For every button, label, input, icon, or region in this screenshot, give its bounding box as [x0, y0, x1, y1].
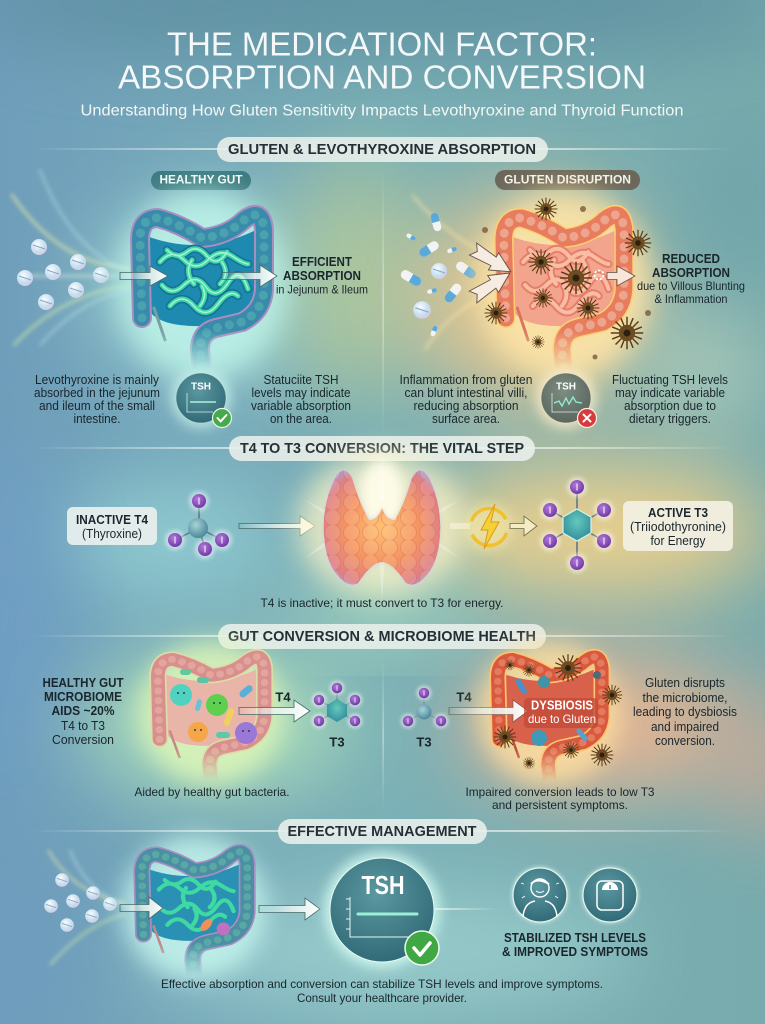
arrow: gut to TSH: [259, 898, 320, 920]
molecule: T3 before gut: [400, 686, 448, 728]
arrow: T4 to thyroid: [239, 516, 315, 536]
section heading: T4 to T3 conversion: [30, 436, 735, 461]
label: active T3: [623, 501, 733, 551]
label: active T3: for Energy: [650, 534, 706, 548]
text: fluctuating TSH note: absorption due to: [624, 399, 716, 413]
panel: effective management: [44, 836, 648, 1005]
text: gluten disrupts: [633, 676, 737, 748]
text: inflammation effect: surface area.: [432, 412, 500, 426]
molecule: T3: [540, 477, 614, 573]
icon: fluctuating TSH gauge: TSH: [556, 382, 576, 392]
arrow: T4 into dysbiosis: [449, 700, 528, 722]
pills: [44, 873, 117, 932]
arrow: out of gut: [222, 265, 277, 287]
text: fluctuating TSH note: dietary triggers.: [629, 412, 711, 426]
icon: healthy microbiome gut: [138, 641, 284, 785]
pills: [17, 239, 109, 310]
caption: T4 inactive: T4 is inactive; it must convert to T3 for energy.: [260, 596, 504, 610]
icon: restored intestine: [122, 836, 267, 980]
text: inflammation effect: reducing absorption: [414, 399, 519, 413]
badge: healthy gut: HEALTHY GUT: [160, 174, 242, 186]
arrow: bolt to T3: [510, 516, 537, 536]
flow streams: [12, 170, 130, 345]
icon: person: [512, 867, 568, 923]
text: microbiome stat: AIDS ~20%: [52, 704, 114, 718]
text: inflammation effect: can blunt intestinal villi,: [404, 386, 528, 400]
text: microbiome stat: MICROBIOME: [44, 690, 122, 704]
label: T3: T3: [329, 734, 345, 750]
label: stabilized TSH: & IMPROVED SYMPTOMS: [502, 945, 648, 959]
label: inactive T4: [67, 507, 157, 545]
text: microbiome stat: T4 to T3: [61, 719, 105, 733]
icon: stable TSH chart: TSH: [362, 870, 404, 900]
badge: healthy gut: [151, 171, 251, 190]
text: TSH note: [251, 373, 351, 426]
caption: closing advice: Consult your healthcare provider.: [297, 991, 467, 1005]
text: TSH note: on the area.: [270, 412, 332, 426]
text: fluctuating TSH note: [612, 373, 728, 426]
label: reduced absorption: REDUCED: [662, 252, 720, 266]
text: TSH note: Statuciite TSH: [264, 373, 338, 387]
section heading: T4 to T3 conversion: T4 TO T3 CONVERSION: THE VITAL STEP: [240, 440, 524, 457]
text: absorption site: [34, 373, 160, 426]
panel: conversion flow: [67, 452, 733, 610]
badge: gluten disruption: [495, 170, 640, 190]
text: gluten disrupts: conversion.: [655, 734, 715, 748]
text: inflammation effect: [400, 373, 533, 426]
title: THE MEDICATION FACTOR:: [167, 26, 597, 62]
caption: healthy bacteria: Aided by healthy gut bacteria.: [134, 785, 290, 799]
caption: impaired conversion: and persistent symptoms.: [492, 798, 628, 812]
text: gluten disrupts: Gluten disrupts: [645, 676, 725, 690]
label: dysbiosis: DYSBIOSIS: [531, 698, 593, 712]
arrow: pills into gut: [120, 897, 163, 919]
icon: stable TSH gauge: [171, 368, 232, 428]
title: ABSORPTION AND CONVERSION: [118, 58, 646, 96]
icon: energy bolt: [450, 503, 513, 551]
label: reduced absorption: due to Villous Blunting: [637, 279, 745, 293]
caption: impaired conversion: [466, 785, 655, 812]
icon: gluten particles: [482, 198, 651, 360]
flow streams: [412, 195, 500, 350]
molecule: T3 output: [312, 680, 362, 728]
label: stabilized TSH: [502, 931, 648, 959]
label: efficient absorption: in Jejunum & Ileum: [276, 282, 368, 296]
label: reduced absorption: ABSORPTION: [652, 266, 730, 280]
subtitle: Understanding How Gluten Sensitivity Impacts Levothyroxine and Thyroid Function: [80, 102, 684, 120]
label: T4: T4: [275, 690, 291, 704]
panel: dysbiosis: [400, 641, 737, 812]
label: stabilized TSH: STABILIZED TSH LEVELS: [504, 931, 646, 945]
label: efficient absorption: ABSORPTION: [283, 269, 361, 283]
text: microbiome stat: [42, 676, 124, 747]
text: TSH note: variable absorption: [251, 399, 351, 413]
section heading: effective management: [30, 819, 735, 844]
section heading: effective management: EFFECTIVE MANAGEMENT: [288, 823, 476, 840]
text: fluctuating TSH note: may indicate variable: [615, 386, 725, 400]
panel: gluten disruption: [399, 170, 745, 428]
arrow: into gut: [120, 266, 168, 286]
section heading: gut conversion and microbiome: GUT CONVERSION & MICROBIOME HEALTH: [228, 628, 536, 645]
text: absorption site: intestine.: [74, 412, 120, 426]
text: gluten disrupts: and impaired: [651, 720, 719, 734]
label: efficient absorption: [276, 255, 368, 296]
section heading: gut conversion and microbiome: [30, 624, 735, 649]
molecule: T4: [165, 491, 232, 559]
text: microbiome stat: Conversion: [52, 733, 114, 747]
caption: impaired conversion: Impaired conversion leads to low T3: [466, 785, 655, 799]
text: inflammation effect: Inflammation from gluten: [400, 373, 533, 387]
text: gluten disrupts: leading to dysbiosis: [633, 705, 737, 719]
icon: stable TSH chart: [324, 852, 498, 968]
icon: inflamed intestine: [477, 190, 651, 380]
text: absorption site: and ileum of the small: [39, 399, 155, 413]
flow streams: [48, 850, 125, 965]
panel: healthy gut: [12, 170, 368, 428]
text: microbiome stat: HEALTHY GUT: [42, 676, 124, 690]
badge: gluten disruption: GLUTEN DISRUPTION: [504, 174, 631, 186]
title: [118, 26, 646, 96]
text: TSH note: levels may indicate: [252, 386, 351, 400]
caption: closing advice: [161, 977, 603, 1005]
pills: [399, 212, 478, 337]
label: T3: T3: [416, 734, 432, 750]
label: reduced absorption: & Inflammation: [654, 292, 728, 306]
text: absorption site: absorbed in the jejunum: [34, 386, 160, 400]
text: fluctuating TSH note: Fluctuating TSH levels: [612, 373, 728, 387]
arrow: T4 into T3: [239, 700, 310, 722]
icon: thyroid gland: [297, 452, 467, 600]
icon: stable TSH gauge: TSH: [191, 382, 211, 392]
label: T4: T4: [456, 690, 472, 704]
arrow: reduced output: [594, 266, 635, 286]
label: active T3: ACTIVE T3: [648, 506, 708, 520]
icon: dysbiotic gut: [478, 641, 622, 785]
arrows: blocked into gut: [468, 240, 516, 305]
text: gluten disrupts: the microbiome,: [642, 691, 728, 705]
label: active T3: (Triiodothyronine): [630, 520, 726, 534]
label: inactive T4: INACTIVE T4: [76, 513, 148, 527]
section heading: gluten and levothyroxine absorption: GLUTEN & LEVOTHYROXINE ABSORPTION: [228, 141, 536, 158]
label: efficient absorption: EFFICIENT: [292, 255, 352, 269]
icon: healthy intestine: [117, 190, 287, 380]
panel: healthy microbiome: [42, 641, 362, 799]
icon: scale: [582, 867, 638, 923]
icon: fluctuating TSH gauge: [536, 368, 596, 428]
label: dysbiosis: [524, 698, 598, 728]
caption: closing advice: Effective absorption and conversion can stabilize TSH levels and improve symptoms.: [161, 977, 603, 991]
label: reduced absorption: [637, 252, 745, 306]
text: absorption site: Levothyroxine is mainly: [35, 373, 160, 387]
label: dysbiosis: due to Gluten: [528, 712, 596, 726]
section heading: gluten and levothyroxine absorption: [30, 137, 735, 162]
label: inactive T4: (Thyroxine): [82, 527, 142, 541]
